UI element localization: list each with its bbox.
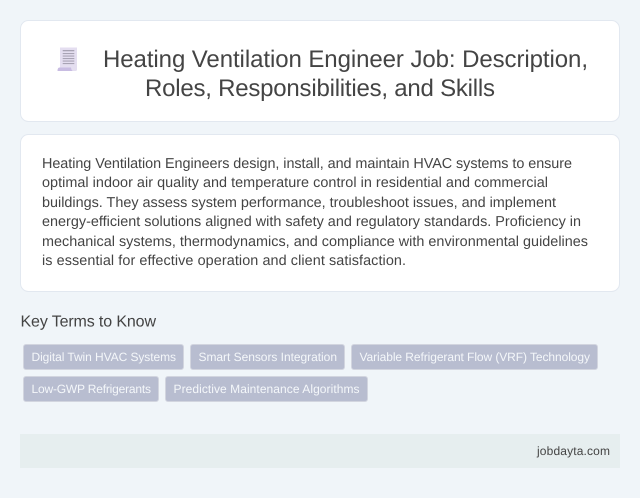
description text: energy-efficient solutions aligned with safety and regulatory standards. Proficiency in — [42, 214, 581, 230]
tag: low-gwp refrigerants: Low-GWP Refrigerants — [32, 382, 151, 396]
icon: paper scroll — [58, 48, 77, 71]
tag: variable refrigerant flow — [352, 344, 598, 370]
description text: Heating Ventilation Engineers design, install, and maintain HVAC systems to ensure — [42, 156, 572, 172]
tag: smart sensors: Smart Sensors Integration — [198, 350, 337, 364]
tag: smart sensors — [190, 344, 344, 370]
description text — [42, 156, 588, 269]
tag: digital twin — [24, 344, 184, 370]
tag: variable refrigerant flow: Variable Refrigerant Flow (VRF) Technology — [360, 350, 590, 364]
panel: title card — [20, 20, 620, 122]
tag: predictive maintenance: Predictive Maintenance Algorithms — [174, 382, 360, 396]
heading: key terms: Key Terms to Know — [20, 314, 156, 330]
tag: predictive maintenance — [166, 376, 368, 402]
title — [103, 46, 588, 102]
tags: key terms — [24, 344, 598, 402]
description text: is essential for effective operation and client satisfaction. — [42, 253, 406, 269]
panel: description card — [20, 134, 620, 292]
tag: low-gwp refrigerants — [24, 376, 158, 402]
description text: optimal indoor air quality and temperature control in residential and commercial — [42, 175, 548, 191]
tag: digital twin: Digital Twin HVAC Systems — [32, 350, 176, 364]
title: Heating Ventilation Engineer Job: Description, — [103, 46, 588, 73]
description text: mechanical systems, thermodynamics, and compliance with environmental guidelines — [42, 234, 588, 250]
footer: jobdayta.com — [536, 444, 610, 458]
title: Roles, Responsibilities, and Skills — [145, 75, 495, 102]
footer — [20, 434, 620, 468]
description text: buildings. They assess system performance, troubleshoot issues, and implement — [42, 195, 556, 211]
